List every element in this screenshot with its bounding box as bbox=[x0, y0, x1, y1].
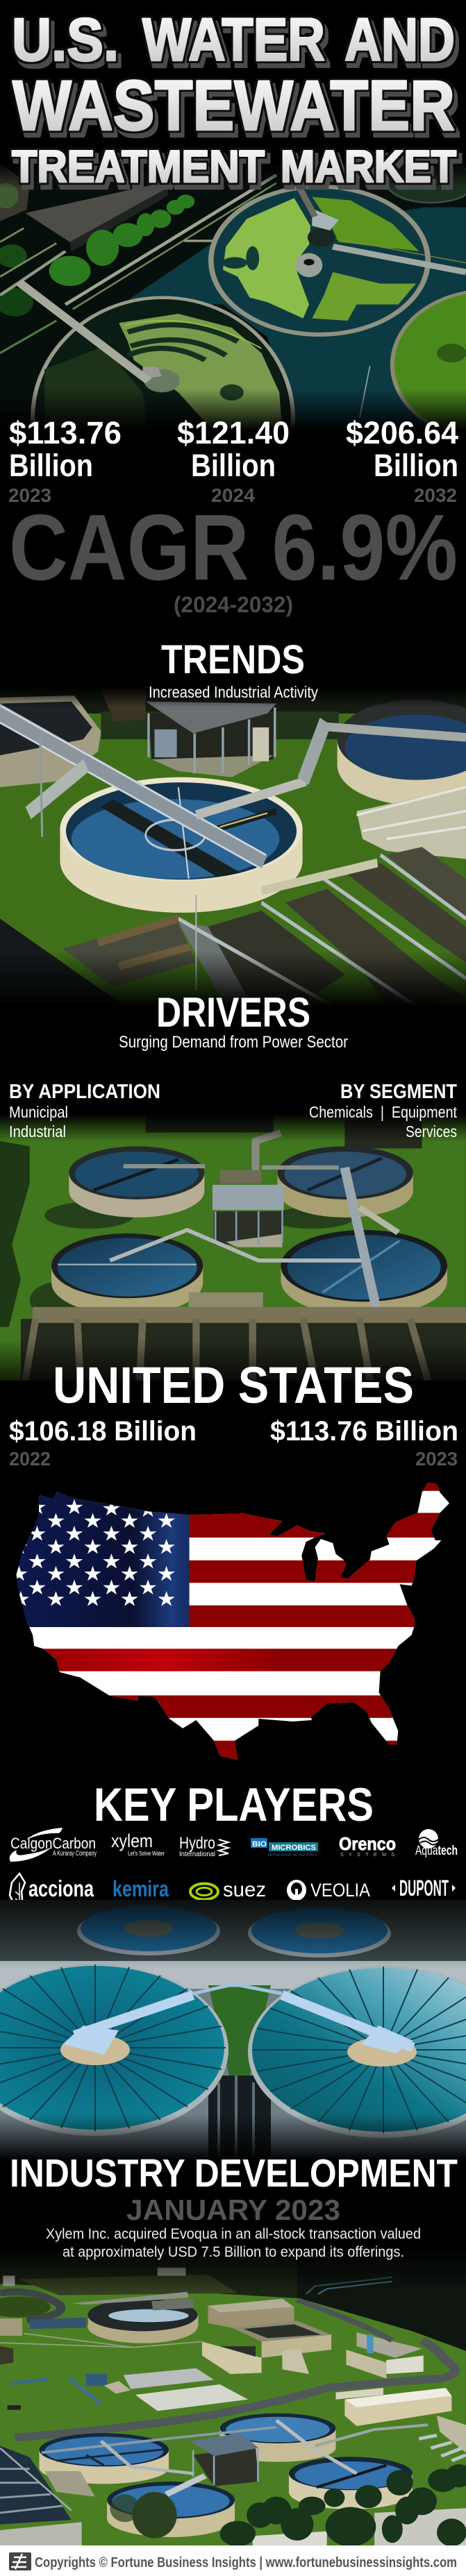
CAGR period: (2024-2032) bbox=[174, 592, 293, 617]
logo: Acciona: acciona bbox=[28, 1876, 94, 1901]
logo: Calgon Carbon bbox=[10, 1828, 97, 1862]
stat: 2024: $121.40 bbox=[177, 415, 290, 451]
stat: united states 2022: 2022 bbox=[9, 1448, 51, 1470]
stat: 2032: 2032 bbox=[414, 485, 457, 506]
segment: by application bbox=[9, 1081, 160, 1140]
logo: Hydro International: International bbox=[179, 1851, 215, 1858]
stat: 2024 bbox=[177, 415, 290, 506]
trends text: Increased Industrial Activity bbox=[149, 683, 318, 701]
logo: Bio-Microbics: MICROBICS bbox=[272, 1844, 316, 1852]
fade: top of radial clarifier photo bbox=[0, 1900, 466, 1969]
logo: Kemira: kemira bbox=[113, 1876, 169, 1901]
development text bbox=[46, 2226, 421, 2260]
logo: Orenco Systems: Orenco bbox=[339, 1833, 396, 1854]
stat: 2023: $113.76 bbox=[9, 415, 122, 451]
stat: united states 2022 bbox=[9, 1416, 197, 1470]
photo: green treatment tanks bbox=[0, 164, 466, 428]
title: TREATMENT bbox=[12, 141, 265, 192]
logo: Bio-Microbics: BETTER WATER. BETTER WORLD. bbox=[268, 1853, 318, 1858]
fade: bottom of lawn photo bbox=[0, 951, 466, 1007]
logo: Calgon Carbon: CalgonCarbon bbox=[10, 1835, 96, 1852]
heading: key players: KEY PLAYERS bbox=[94, 1778, 374, 1831]
logo: Orenco Systems: SYSTEMS bbox=[340, 1853, 394, 1858]
stat: 2032 bbox=[346, 415, 458, 506]
logo: xylem: xylem bbox=[111, 1830, 153, 1851]
logo: Aquatech: Aquatech bbox=[415, 1844, 458, 1858]
development text: Xylem Inc. acquired Evoqua in an all-stock transaction valued bbox=[46, 2226, 421, 2242]
logo: Bio-Microbics: BIO bbox=[252, 1840, 267, 1849]
stat: united states 2023: $113.76 Billion bbox=[270, 1416, 458, 1447]
title bbox=[12, 6, 456, 192]
logo: Suez bbox=[190, 1878, 266, 1901]
heading: drivers: DRIVERS bbox=[156, 989, 310, 1036]
segment: by application: Municipal bbox=[9, 1103, 68, 1121]
logo: Suez: suez bbox=[223, 1878, 266, 1901]
photo: four circular clarifiers bbox=[0, 1112, 466, 1383]
icon: Fortune Business Insights logo bbox=[9, 2552, 31, 2570]
segment: by application: Industrial bbox=[9, 1122, 66, 1140]
fade: top of lawn photo bbox=[0, 687, 466, 707]
fade: top of clarifier photo bbox=[0, 1114, 466, 1142]
title: WATER bbox=[142, 6, 325, 74]
stat: 2023: 2023 bbox=[8, 485, 51, 506]
development date: JANUARY 2023 bbox=[126, 2194, 340, 2226]
stat: united states 2023: 2023 bbox=[415, 1448, 458, 1470]
logo: Aquatech bbox=[415, 1829, 458, 1858]
development text: at approximately USD 7.5 Billion to expand its offerings. bbox=[63, 2244, 404, 2260]
logo: Bio-Microbics bbox=[251, 1838, 318, 1858]
logo: Hydro International: Hydro bbox=[179, 1834, 215, 1853]
fade: bottom of clarifier photo bbox=[0, 1340, 466, 1381]
drivers text: Surging Demand from Power Sector bbox=[119, 1033, 348, 1052]
stat: 2032: $206.64 bbox=[346, 415, 458, 451]
stat: 2023: Billion bbox=[9, 448, 93, 483]
photo: blue radial clarifiers bbox=[0, 1900, 466, 2160]
stat: united states 2023 bbox=[270, 1416, 458, 1470]
fade: bottom of green tank photo bbox=[0, 389, 466, 430]
logo: Veolia bbox=[287, 1880, 370, 1901]
stat: united states 2022: $106.18 Billion bbox=[9, 1416, 197, 1447]
segment: by application: BY APPLICATION bbox=[9, 1081, 160, 1103]
logo: Acciona bbox=[10, 1874, 94, 1908]
stat: 2024: Billion bbox=[191, 448, 276, 483]
fade: top of green tank photo bbox=[0, 161, 466, 189]
footer bar bbox=[0, 2545, 466, 2576]
heading: united states: UNITED STATES bbox=[53, 1356, 414, 1414]
title: U.S. bbox=[12, 6, 119, 74]
logo: Calgon Carbon: A Kuraray Company bbox=[53, 1850, 97, 1858]
map: USA filled with flag bbox=[0, 1481, 466, 1764]
logo: xylem: Let's Solve Water bbox=[128, 1850, 165, 1857]
logo: Hydro International bbox=[179, 1834, 228, 1858]
heading: trends: TRENDS bbox=[161, 637, 305, 682]
fade: bottom of radial clarifier photo bbox=[0, 2114, 466, 2160]
photo: plant with green lawn bbox=[0, 684, 466, 1010]
segment: by segment bbox=[309, 1081, 458, 1140]
segment: by segment: Services bbox=[406, 1122, 457, 1140]
stat: 2024: 2024 bbox=[211, 485, 255, 506]
stat: 2023 bbox=[8, 415, 122, 506]
fade: top of aerial photo bbox=[0, 2251, 466, 2293]
photo: aerial view of plant bbox=[0, 2249, 466, 2548]
logo: Veolia: VEOLIA bbox=[310, 1880, 370, 1901]
